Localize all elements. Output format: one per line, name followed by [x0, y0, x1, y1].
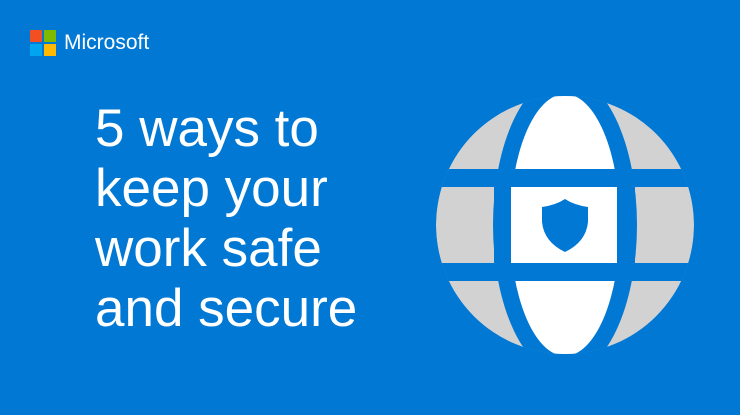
title: keep your — [95, 159, 328, 218]
logo: Microsoft — [30, 30, 150, 56]
title: 5 ways to — [95, 99, 319, 158]
title — [94, 99, 357, 338]
icon: shield — [542, 199, 588, 252]
logo text: Microsoft — [64, 31, 149, 54]
title: work safe — [95, 219, 322, 278]
icon: globe with shield — [436, 96, 694, 354]
title: and secure — [95, 279, 357, 338]
icon: four squares — [30, 30, 56, 56]
